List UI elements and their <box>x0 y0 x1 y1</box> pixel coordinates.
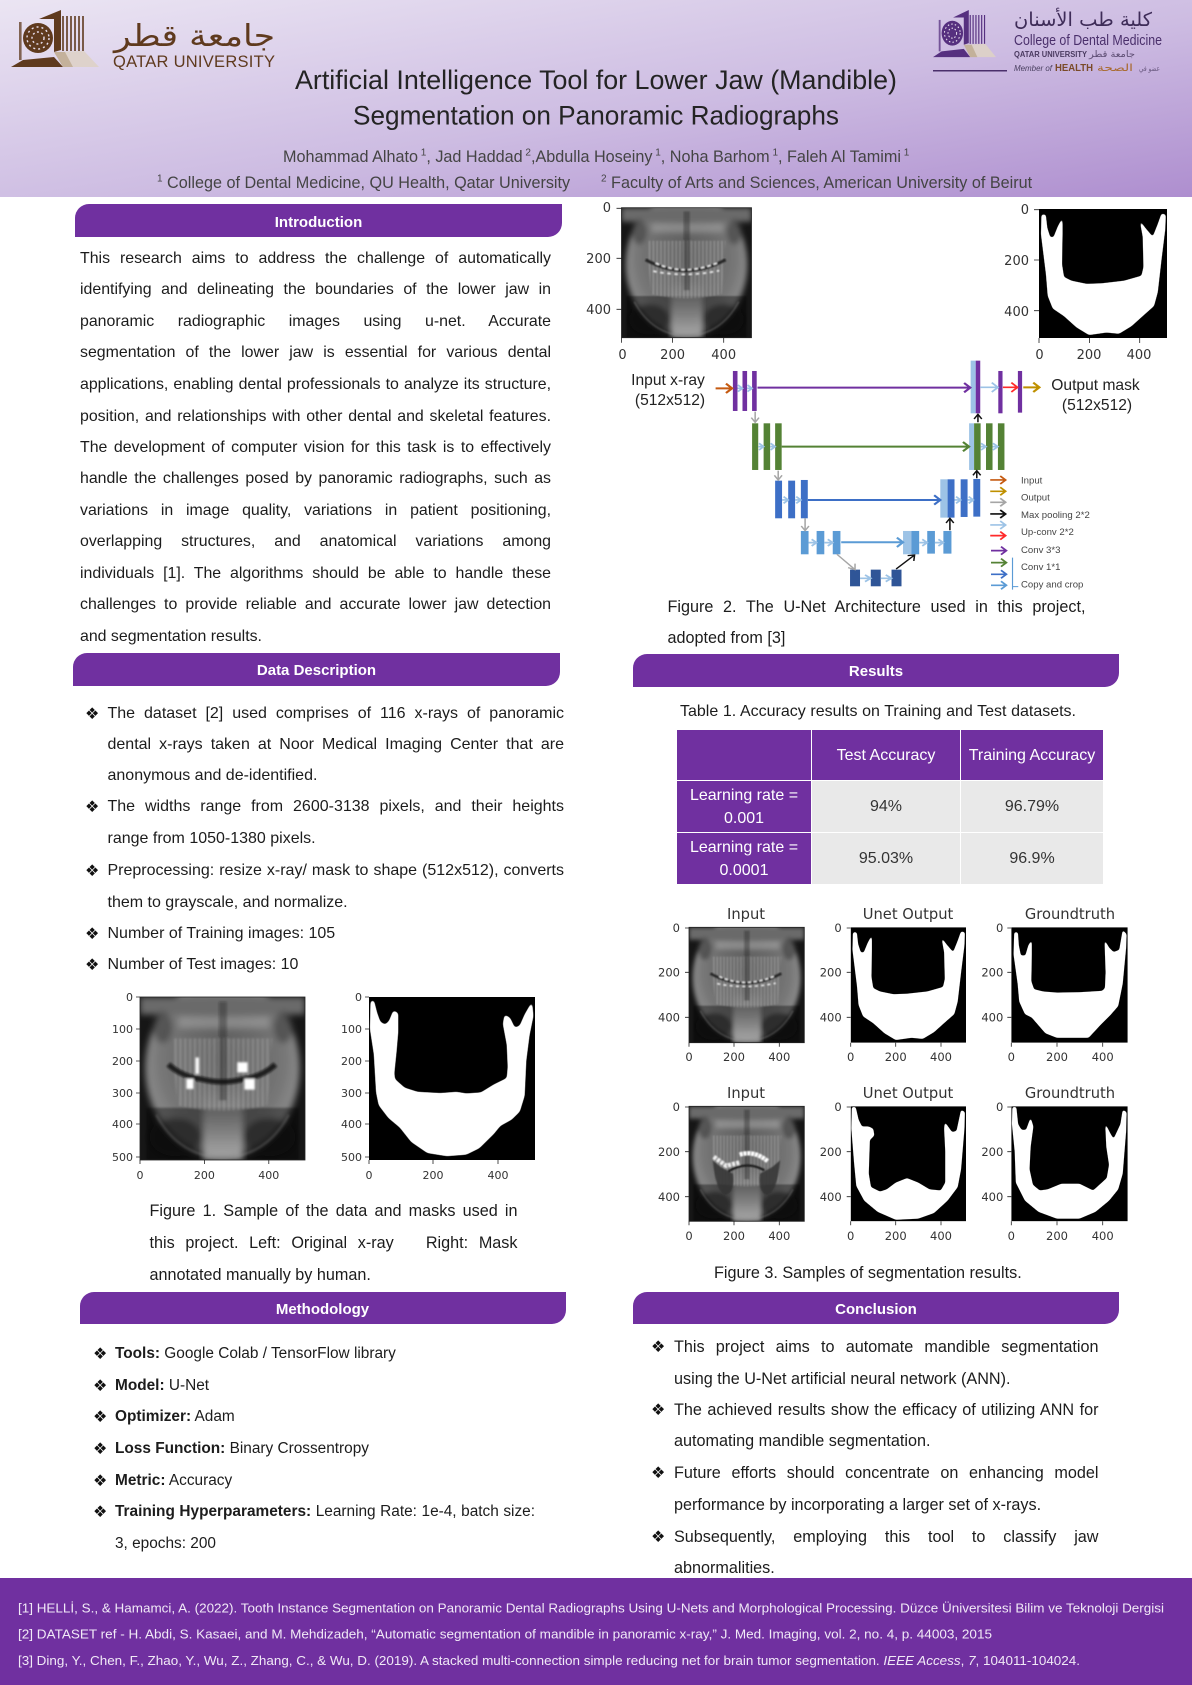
table: accuracy results: 0.0001 <box>720 862 768 878</box>
text: identifying and delineating the boundaries of the lower jaw in <box>80 281 551 298</box>
text: ❖ <box>651 1337 665 1356</box>
figure 3: row 1 U-Net output: 200 <box>820 966 842 980</box>
logo: College of Dental Medicine: جامعة قطر <box>1088 50 1135 60</box>
heading: Results <box>633 654 1119 687</box>
figure 2: U-Net architecture diagram: Input x-ray <box>631 372 705 389</box>
text: Model: U-Net <box>115 1376 209 1394</box>
figure 2: output mask plot: 200 <box>1004 254 1029 269</box>
heading: Introduction: Introduction <box>275 214 362 231</box>
text: abnormalities. <box>674 1559 775 1577</box>
heading: Methodology: Methodology <box>276 1301 369 1318</box>
figure 1: mask plot: 300 <box>341 1087 362 1100</box>
text: Optimizer: Adam <box>115 1408 235 1425</box>
text: challenges to provide reliable and accurate lower jaw detection <box>80 596 551 613</box>
text: dental x-rays taken at Noor Medical Imaging Center that are <box>108 736 564 753</box>
text: This project aims to automate mandible segmentation <box>674 1338 1098 1356</box>
text: Tools: Google Colab / TensorFlow library <box>115 1345 396 1362</box>
table: accuracy results: 94% <box>870 798 902 815</box>
heading: Data Description: Data Description <box>257 662 376 679</box>
heading: Conclusion <box>633 1292 1119 1324</box>
figure 3: row 2 U-Net output: 0 <box>834 1100 842 1114</box>
logo: College of Dental Medicine: Member of <box>1014 64 1053 73</box>
figure 3: row 2 U-Net output: 400 <box>820 1190 842 1204</box>
figure 3: row 1 groundtruth: 200 <box>981 966 1003 980</box>
text: The development of computer vision for this task is to effectively <box>80 438 551 456</box>
text: ❖ <box>85 955 99 974</box>
caption: table 1: Table 1. Accuracy results on Training and Test datasets. <box>680 702 1076 720</box>
figure 3: row 2 input: 200 <box>658 1145 680 1159</box>
header band <box>0 0 1192 197</box>
figure 3: row 2 U-Net output: 200 <box>885 1229 907 1243</box>
figure 3: row 2 U-Net output: 400 <box>930 1229 952 1243</box>
figure 3: row 1 groundtruth: Groundtruth <box>1025 906 1115 923</box>
text: The dataset [2] used comprises of 116 x-rays of panoramic <box>108 704 564 722</box>
text: 2 Faculty of Arts and Sciences, American University of Beirut <box>601 174 1032 192</box>
figure 2: U-Net architecture diagram: (512x512) <box>1062 397 1132 414</box>
text: ❖ <box>651 1527 665 1546</box>
figure 3: row 2 U-Net output <box>820 1085 966 1243</box>
figure 3: row 1 groundtruth: 0 <box>1008 1050 1015 1064</box>
figure 3: row 1 U-Net output: 0 <box>834 921 842 935</box>
text: them to grayscale, and normalize. <box>108 894 348 910</box>
figure 1: sample x-ray plot: 100 <box>112 1023 133 1036</box>
list: conclusion <box>651 1337 1098 1577</box>
figure 3: row 1 U-Net output: Unet Output <box>863 906 954 923</box>
figure 2: output mask plot: 200 <box>1077 348 1101 363</box>
figure 3: row 1 U-Net output: 0 <box>847 1050 854 1064</box>
figure 3: row 1 input: Input <box>727 906 765 923</box>
table: accuracy results: Training Accuracy <box>969 746 1095 764</box>
figure 1: sample x-ray plot: 400 <box>112 1118 133 1131</box>
figure 3: row 1 groundtruth: 200 <box>1046 1050 1068 1064</box>
figure 2: U-Net architecture diagram: Input <box>1021 476 1043 486</box>
figure 2: output mask plot: 0 <box>1021 203 1029 218</box>
logo: Qatar University <box>11 10 275 71</box>
text: 1 College of Dental Medicine, QU Health, Qatar University <box>157 174 570 192</box>
figure 1: mask plot: 400 <box>488 1169 508 1182</box>
figure 3: row 2 groundtruth: 0 <box>1008 1229 1015 1243</box>
figure 3: row 2 groundtruth: 200 <box>1046 1229 1068 1243</box>
figure 1: mask plot <box>341 991 535 1182</box>
figure 1: sample x-ray plot: 300 <box>112 1087 133 1100</box>
figure 2: U-Net architecture diagram <box>631 361 1140 590</box>
text: ❖ <box>85 861 99 880</box>
figure 3: row 2 input: 0 <box>685 1229 693 1243</box>
logo: College of Dental Medicine: HEALTH <box>1055 63 1093 74</box>
figure 3: row 2 U-Net output: 0 <box>847 1229 854 1243</box>
table: accuracy results: 96.79% <box>1005 798 1059 815</box>
figure 1: sample x-ray plot: 200 <box>194 1169 215 1182</box>
text: Subsequently, employing this tool to classify jaw <box>674 1528 1098 1546</box>
figure 2: input x-ray plot: 200 <box>660 348 685 363</box>
text: automating mandible segmentation. <box>674 1432 930 1450</box>
figure 2: input x-ray plot: 200 <box>586 252 611 267</box>
title <box>295 65 897 130</box>
caption: figure 2 <box>668 598 1086 647</box>
figure 2: output mask plot: 400 <box>1127 348 1151 363</box>
figure 2: U-Net architecture diagram: Copy and crop <box>1021 580 1083 590</box>
figure 3: row 1 U-Net output: 400 <box>930 1050 952 1064</box>
figure 3: row 1 input: 200 <box>723 1050 745 1064</box>
table: accuracy results: Learning rate = <box>690 786 798 804</box>
figure 1: sample x-ray plot: 0 <box>136 1169 144 1182</box>
logo: Qatar University: جامعة قطر <box>112 19 275 54</box>
figure 3: row 2 groundtruth: 0 <box>996 1100 1003 1114</box>
figure 2: output mask plot: 400 <box>1004 305 1029 320</box>
text: anonymous and de-identified. <box>108 767 317 784</box>
text: this project. Left: Original x-ray Right: Mask <box>150 1234 518 1252</box>
logo: College of Dental Medicine: عضو في <box>1139 64 1160 73</box>
figure 3: row 2 groundtruth: 200 <box>981 1145 1003 1159</box>
text: ❖ <box>93 1407 107 1426</box>
figure 3: row 1 U-Net output: 200 <box>885 1050 907 1064</box>
list: data description <box>85 704 564 974</box>
text: ❖ <box>85 704 99 722</box>
text: using the U-Net artificial neural network (ANN). <box>674 1370 1010 1388</box>
figure 2: input x-ray plot: 0 <box>618 348 627 363</box>
figure 3: row 2 input: 0 <box>673 1100 680 1114</box>
figure 3: row 1 input: 0 <box>685 1050 693 1064</box>
text: The widths range from 2600-3138 pixels, and their heights <box>108 798 564 815</box>
text: ❖ <box>93 1470 107 1490</box>
text: Figure 1. Sample of the data and masks used in <box>150 1202 518 1220</box>
text: annotated manually by human. <box>150 1266 371 1284</box>
figure 1: sample x-ray plot: 500 <box>112 1151 133 1164</box>
text: Training Hyperparameters: Learning Rate: 1e-4, batch size: <box>115 1503 535 1520</box>
logo: College of Dental Medicine: الصحة <box>1097 63 1133 74</box>
references footer <box>0 1578 1192 1685</box>
logo: College of Dental Medicine <box>933 8 1162 74</box>
text: Preprocessing: resize x-ray/ mask to shape (512x512), converts <box>108 862 564 879</box>
text: This research aims to address the challenge of automatically <box>80 250 551 267</box>
figure 1: mask plot: 400 <box>341 1118 362 1131</box>
text: 3, epochs: 200 <box>115 1534 216 1552</box>
text: range from 1050-1380 pixels. <box>108 830 316 847</box>
references footer: [3] Ding, Y., Chen, F., Zhao, Y., Wu, Z., Zhang, C., & Wu, D. (2019). A stacked multi-connection simple reducing net for brain tumor segmentation. IEEE Access, 7, 104011-104024. <box>18 1653 1080 1668</box>
caption: figure 1 <box>150 1202 518 1284</box>
logo: College of Dental Medicine: كلية طب الأسنان <box>1014 8 1153 31</box>
figure 2: U-Net architecture diagram: Up-conv 2*2 <box>1021 527 1074 538</box>
text: applications, enabling dental professionals to analyze its structure, <box>80 376 551 393</box>
figure 1: mask plot: 100 <box>341 1023 362 1036</box>
text: Future efforts should concentrate on enhancing model <box>674 1464 1098 1482</box>
text: ❖ <box>85 797 99 816</box>
figure 3: row 1 input: 400 <box>768 1050 790 1064</box>
figure 3: row 1 groundtruth: 400 <box>981 1010 1003 1024</box>
figure 1: sample x-ray plot: 400 <box>258 1169 279 1182</box>
figure 1: mask plot: 500 <box>341 1151 362 1164</box>
figure 3: row 1 input: 0 <box>673 921 680 935</box>
references footer: [1] HELLİ, S., & Hamamci, A. (2022). Tooth Instance Segmentation on Panoramic Dental Radiographs Using U-Nets and Morphological Processing. Düzce Üniversitesi Bilim ve Teknoloji Dergisi <box>18 1600 1164 1616</box>
list: methodology <box>93 1344 535 1552</box>
figure 3: row 1 groundtruth: 0 <box>996 921 1003 935</box>
text: ❖ <box>93 1502 107 1521</box>
figure 2: input x-ray plot: 400 <box>586 303 611 318</box>
figure 2: U-Net architecture diagram: Conv 3*3 <box>1021 545 1060 556</box>
text: handle the challenges posed by panoramic radiographs, such as <box>80 470 551 486</box>
authors and affiliations <box>157 148 1032 192</box>
figure 3: row 1 input: 200 <box>658 966 680 980</box>
table: accuracy results: 95.03% <box>859 850 913 867</box>
figure 2: U-Net architecture diagram: Output <box>1021 492 1050 504</box>
figure 3: row 2 input: 200 <box>723 1229 745 1243</box>
text: Metric: Accuracy <box>115 1472 232 1488</box>
text: overlapping structures, and anatomical variations among <box>80 533 551 550</box>
text: Loss Function: Binary Crossentropy <box>115 1440 369 1457</box>
text: variations in image quality, variations in patient positioning, <box>80 502 551 518</box>
text: adopted from [3] <box>668 629 785 647</box>
figure 3: row 2 U-Net output: Unet Output <box>863 1085 954 1102</box>
figure 3: row 2 input: Input <box>727 1085 765 1102</box>
caption: figure 3: Figure 3. Samples of segmentation results. <box>714 1264 1022 1282</box>
figure 1: sample x-ray plot: 0 <box>126 991 133 1004</box>
text: segmentation of the lower jaw is essential for various dental <box>80 344 551 361</box>
text: ❖ <box>93 1376 107 1394</box>
text: introduction paragraph <box>80 250 551 644</box>
table: accuracy results <box>677 730 1103 884</box>
text: individuals [1]. The algorithms should be able to handle these <box>80 565 551 582</box>
figure 3: row 2 groundtruth <box>981 1085 1128 1243</box>
figure 1: mask plot: 0 <box>366 1169 372 1182</box>
text: Number of Training images: 105 <box>108 925 335 942</box>
figure 3: row 2 input: 400 <box>658 1190 680 1204</box>
references footer: [2] DATASET ref - H. Abdi, S. Kasaei, and M. Mehdizadeh, “Automatic segmentation of mandible in panoramic x-ray,” J. Med. Imaging, vol. 2, no. 4, p. 44003, 2015 <box>18 1626 992 1642</box>
logo: College of Dental Medicine: QATAR UNIVERSITY <box>1014 50 1088 59</box>
figure 1: sample x-ray plot: 200 <box>112 1055 133 1068</box>
figure 3: row 2 groundtruth: 400 <box>981 1190 1003 1204</box>
figure 3: row 1 groundtruth <box>981 906 1128 1064</box>
text: ❖ <box>93 1344 107 1363</box>
figure 3: row 2 input <box>658 1085 804 1243</box>
figure 3: row 2 U-Net output: 200 <box>820 1145 842 1159</box>
figure 3: row 2 groundtruth: Groundtruth <box>1025 1085 1115 1102</box>
title: Segmentation on Panoramic Radiographs <box>353 100 839 130</box>
text: and segmentation results. <box>80 628 262 644</box>
figure 3: row 1 U-Net output: 400 <box>820 1010 842 1024</box>
figure 2: U-Net architecture diagram: (512x512) <box>635 392 705 409</box>
figure 3: row 2 groundtruth: 400 <box>1092 1229 1114 1243</box>
text: The achieved results show the efficacy of utilizing ANN for <box>674 1400 1098 1418</box>
figure 3: row 1 U-Net output <box>820 906 966 1064</box>
text: performance by incorporating a larger set of x-rays. <box>674 1496 1041 1514</box>
heading: Data Description <box>73 653 560 686</box>
figure 3: row 1 groundtruth: 400 <box>1092 1050 1114 1064</box>
text: Number of Test images: 10 <box>108 956 298 973</box>
text: ❖ <box>651 1462 665 1482</box>
text: position, and relationships with other dental and skeletal features. <box>80 408 551 424</box>
figure 1: sample x-ray plot <box>112 978 305 1182</box>
text: ❖ <box>85 924 99 943</box>
heading: Results: Results <box>849 663 903 680</box>
figure 2: output mask plot <box>1004 203 1167 363</box>
text: ❖ <box>651 1400 665 1418</box>
figure 2: U-Net architecture diagram: Output mask <box>1051 377 1140 394</box>
text: panoramic radiographic images using u-net. Accurate <box>80 312 551 330</box>
figure 1: mask plot: 200 <box>341 1055 362 1068</box>
figure 3: row 2 input: 400 <box>768 1229 790 1243</box>
logo: Qatar University: QATAR UNIVERSITY <box>113 53 275 71</box>
figure 3: row 1 input <box>658 906 804 1064</box>
figure 3: row 1 input: 400 <box>658 1010 680 1024</box>
table: accuracy results: 96.9% <box>1009 850 1055 867</box>
heading: Introduction <box>75 204 562 237</box>
heading: Conclusion: Conclusion <box>835 1301 917 1318</box>
table: accuracy results: 0.001 <box>724 810 764 826</box>
text: Mohammad Alhato 1, Jad Haddad 2,Abdulla Hoseiny 1, Noha Barhom 1, Faleh Al Tamimi 1 <box>283 148 909 166</box>
text: Figure 2. The U-Net Architecture used in this project, <box>668 598 1086 616</box>
table: accuracy results: Learning rate = <box>690 838 798 856</box>
figure 1: mask plot: 0 <box>355 991 362 1004</box>
figure 2: U-Net architecture diagram: Max pooling 2*2 <box>1021 510 1090 521</box>
figure 2: input x-ray plot: 0 <box>603 201 611 216</box>
table: accuracy results: Test Accuracy <box>837 746 935 764</box>
figure 1: mask plot: 200 <box>422 1169 444 1182</box>
figure 2: output mask plot: 0 <box>1035 348 1044 363</box>
heading: Methodology <box>80 1292 566 1324</box>
text: ❖ <box>93 1439 107 1458</box>
logo: College of Dental Medicine: College of Dental Medicine <box>1014 32 1162 49</box>
figure 2: input x-ray plot: 400 <box>711 348 736 363</box>
figure 2: U-Net architecture diagram: Conv 1*1 <box>1021 562 1060 573</box>
title: Artificial Intelligence Tool for Lower Jaw (Mandible) <box>295 65 897 95</box>
figure 2: input x-ray plot <box>586 192 752 363</box>
